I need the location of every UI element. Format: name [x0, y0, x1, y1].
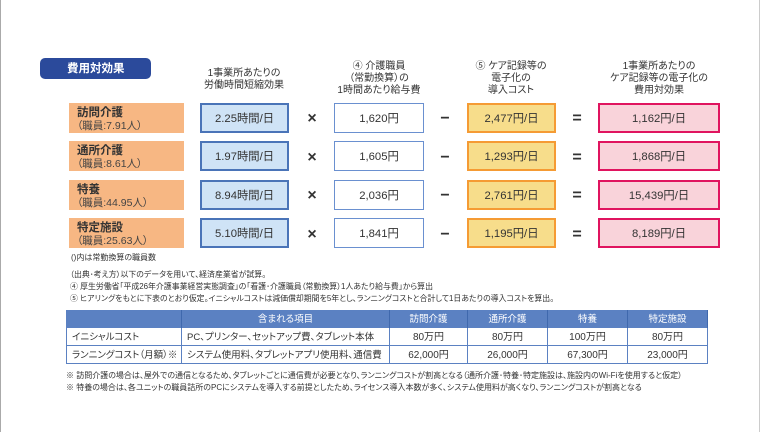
footnotes: [66, 371, 682, 392]
operator: minus: −: [440, 226, 450, 243]
table row: ランニングコスト: 23,000円: [647, 350, 688, 361]
row label: 特定施設: [69, 218, 184, 248]
table row: イニシャルコスト: イニシャルコスト: [72, 332, 139, 343]
value: 導入コスト 特定施設: 1,195円/日: [484, 228, 538, 240]
title: 費用対効果: 費用対効果: [67, 63, 124, 75]
operator: times: ×: [307, 110, 317, 127]
column heading: 労働時間短縮効果: 1事業所あたりの: [208, 68, 280, 79]
table header row: 訪問介護: [409, 314, 448, 325]
operator: equals: =: [572, 187, 582, 204]
value: 給与費 特定施設: 1,841円: [359, 228, 399, 240]
table row: イニシャルコスト: 100万円: [569, 332, 606, 343]
table row: ランニングコスト: [67, 346, 708, 364]
value: 労働時間 特定施設: 5.10時間/日: [215, 228, 274, 240]
table header row: 通所介護: [488, 314, 526, 325]
value: 費用対効果 特定施設: [598, 218, 720, 248]
column heading: 費用対効果: [610, 60, 708, 96]
column heading: 給与費: [337, 60, 421, 96]
source notes: （出典･考え方）以下のデータを用いて、経済産業省が試算。: [70, 270, 266, 279]
row label: 訪問介護: 訪問介護: [77, 107, 123, 119]
value: 労働時間 特養: 8.94時間/日: [215, 190, 274, 202]
source notes: [70, 270, 554, 303]
table row: イニシャルコスト: 80万円: [413, 332, 444, 343]
table header row: [67, 310, 708, 328]
value: 導入コスト 通所介護: 1,293円/日: [484, 151, 538, 163]
value: 費用対効果 訪問介護: 1,162円/日: [632, 113, 686, 125]
row label: 特養: [69, 180, 184, 210]
row label: 特養: 特養: [77, 184, 100, 196]
value: 労働時間 通所介護: 1.97時間/日: [215, 151, 274, 163]
value: 導入コスト 特養: 2,761円/日: [484, 190, 538, 202]
value: 導入コスト 通所介護: [467, 141, 556, 171]
value: 労働時間 訪問介護: 2.25時間/日: [215, 113, 274, 125]
column heading: 労働時間短縮効果: 労働時間短縮効果: [204, 80, 284, 91]
table row: ランニングコスト: システム使用料、タブレットアプリ使用料、通信費: [187, 350, 382, 361]
value: 導入コスト 訪問介護: [467, 103, 556, 133]
operator: equals: =: [572, 110, 582, 127]
operator: equals: =: [572, 226, 582, 243]
table header row: 特養: [578, 314, 597, 325]
column heading: 費用対効果: 費用対効果: [634, 85, 684, 96]
source notes: ⑤ ヒアリングをもとに下表のとおり仮定。イニシャルコストは減価償却期間を5年とし、ランニングコストと合計して1日あたりの導入コストを算出。: [70, 294, 554, 303]
value: 給与費 特定施設: [334, 218, 424, 248]
operator: minus: −: [440, 110, 450, 127]
value: 導入コスト 特定施設: [467, 218, 556, 248]
row label: 訪問介護: [69, 103, 184, 133]
table row: ランニングコスト: ランニングコスト（月額）※: [72, 350, 177, 361]
table row: イニシャルコスト: 80万円: [492, 332, 523, 343]
column heading: 労働時間短縮効果: [204, 67, 284, 91]
operator: equals: =: [572, 149, 582, 166]
value: 費用対効果 特定施設: 8,189円/日: [632, 228, 686, 240]
row label: 特定施設: （職員:25.63人）: [77, 235, 148, 247]
column heading: 導入コスト: 電子化の: [491, 73, 531, 84]
table row: ランニングコスト: 67,300円: [567, 350, 608, 361]
value: 労働時間 特定施設: [200, 218, 289, 248]
note: 常勤換算: ()内は常勤換算の職員数: [71, 253, 156, 262]
footnotes: ※ 訪問介護の場合は、屋外での通信となるため、タブレットごとに通信費が必要となり、ランニングコストが割高となる（通所介護･特養･特定施設は、施設内のWi-Fiを使用すると仮定）: [66, 371, 682, 380]
value: 費用対効果 特養: 15,439円/日: [629, 190, 689, 202]
value: 導入コスト 訪問介護: 2,477円/日: [484, 113, 538, 125]
column heading: 導入コスト: 導入コスト: [488, 85, 534, 96]
value: 費用対効果 訪問介護: [598, 103, 720, 133]
row label: 特養: （職員:44.95人）: [77, 197, 148, 209]
column heading: 導入コスト: [475, 60, 547, 96]
column heading: 給与費: 1時間あたり給与費: [337, 85, 421, 96]
operator: times: ×: [307, 187, 317, 204]
row label: 訪問介護: （職員:7.91人）: [77, 120, 142, 132]
value: 費用対効果 特養: [598, 180, 720, 210]
table header row: 特定施設: [648, 314, 686, 325]
row label: 通所介護: （職員:8.61人）: [77, 158, 142, 170]
row label: 通所介護: 通所介護: [77, 145, 123, 157]
operator: minus: −: [440, 187, 450, 204]
operator: times: ×: [307, 226, 317, 243]
operator: times: ×: [307, 149, 317, 166]
value: 労働時間 特養: [200, 180, 289, 210]
column heading: 導入コスト: ⑤ ケア記録等の: [475, 61, 547, 72]
value: 給与費 特養: 2,036円: [359, 190, 399, 202]
column heading: 給与費: （常勤換算）の: [349, 73, 409, 84]
column heading: 給与費: ④ 介護職員: [353, 61, 405, 72]
footnotes: ※ 特養の場合は、各ユニットの職員詰所のPCにシステムを導入する前提としたため、ライセンス導入本数が多く、システム使用料が高くなり、ランニングコストが割高となる: [66, 383, 642, 392]
row label: 通所介護: [69, 141, 184, 171]
value: 給与費 訪問介護: 1,620円: [359, 113, 399, 125]
table row: イニシャルコスト: 80万円: [652, 332, 683, 343]
value: 給与費 訪問介護: [334, 103, 424, 133]
table header row: 含まれる項目: [258, 314, 313, 325]
table row: イニシャルコスト: PC、プリンター、セットアップ費、タブレット本体: [187, 332, 374, 343]
table row: ランニングコスト: 62,000円: [408, 350, 449, 361]
value: 給与費 通所介護: [334, 141, 424, 171]
row label: 特定施設: 特定施設: [77, 222, 123, 234]
value: 給与費 通所介護: 1,605円: [359, 151, 399, 163]
value: 労働時間 通所介護: [200, 141, 289, 171]
value: 労働時間 訪問介護: [200, 103, 289, 133]
title: 費用対効果: [40, 58, 151, 79]
value: 導入コスト 特養: [467, 180, 556, 210]
value: 費用対効果 通所介護: [598, 141, 720, 171]
table row: イニシャルコスト: [67, 328, 708, 346]
column heading: 費用対効果: ケア記録等の電子化の: [610, 73, 708, 84]
table: コスト内訳: [66, 310, 708, 364]
column heading: 費用対効果: 1事業所あたりの: [623, 61, 695, 72]
value: 費用対効果 通所介護: 1,868円/日: [632, 151, 686, 163]
value: 給与費 特養: [334, 180, 424, 210]
source notes: ④ 厚生労働省「平成26年介護事業経営実態調査」の「看護･介護職員（常勤換算）1人あたり給与費」から算出: [70, 282, 433, 291]
table row: ランニングコスト: 26,000円: [487, 350, 528, 361]
operator: minus: −: [440, 149, 450, 166]
